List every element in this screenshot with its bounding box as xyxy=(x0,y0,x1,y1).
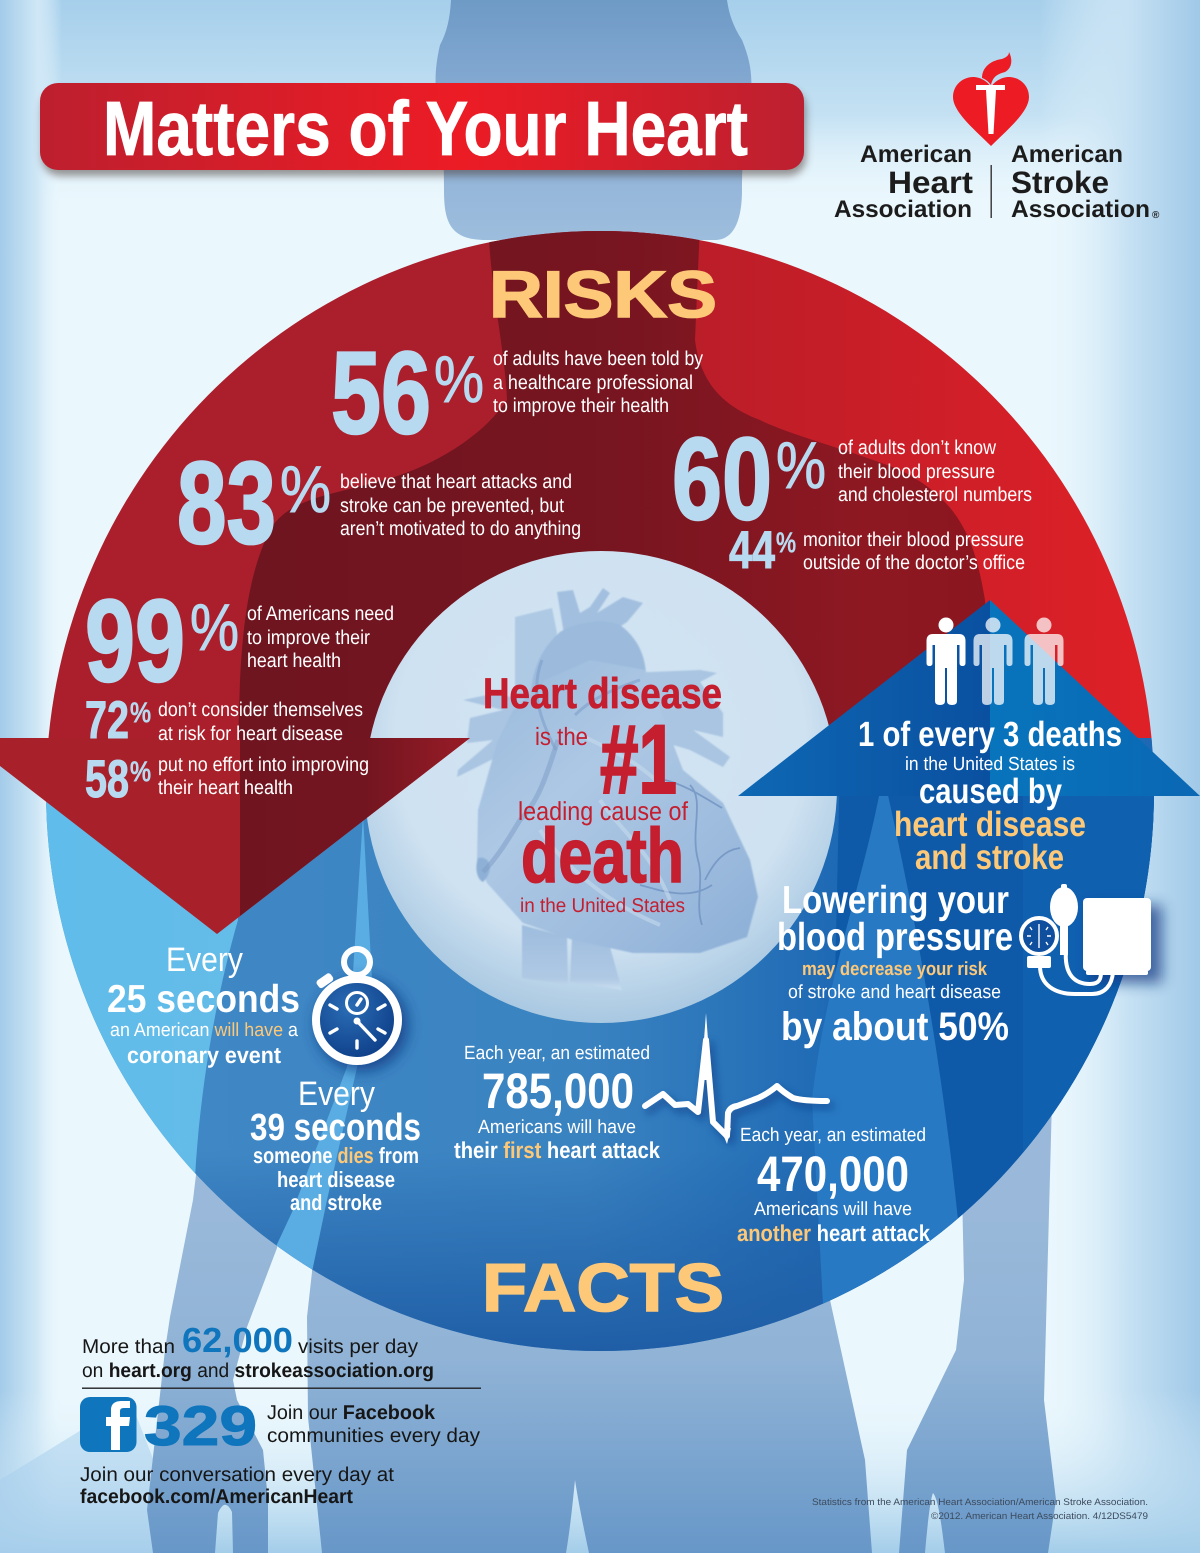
fact: 785,000 first heart attacks: their first heart attack xyxy=(454,1137,660,1163)
fact: every 39 seconds xyxy=(250,1075,421,1215)
stat: 56% xyxy=(331,327,703,458)
stat: 72%: 72 xyxy=(85,691,129,750)
logo: American Heart Association / American Stroke Association: American xyxy=(1011,141,1123,168)
web visits: visits per day xyxy=(298,1336,418,1358)
icon: ekg line xyxy=(645,1013,831,1144)
stat: 83%: % xyxy=(280,452,331,526)
web visits: More than xyxy=(82,1336,175,1358)
stat: 60%: % xyxy=(776,428,826,502)
heart illustration xyxy=(457,588,758,990)
fact: 1 of every 3 deaths xyxy=(858,715,1122,877)
fact: 1 of every 3 deaths: heart disease xyxy=(894,805,1086,844)
icon: blood pressure cuff xyxy=(1021,884,1162,994)
fact: every 39 seconds: someone dies from xyxy=(253,1143,419,1168)
stat: 99%: to improve their xyxy=(247,627,370,649)
fact: lowering your blood pressure: by about 50% xyxy=(781,1005,1009,1049)
stat: 58%: put no effort into improving xyxy=(158,754,369,776)
facebook communities: communities every day xyxy=(267,1425,480,1447)
center message: heart disease is the #1: death xyxy=(521,813,684,899)
icon: facebook xyxy=(80,1397,136,1452)
stat: 99%: % xyxy=(190,590,239,664)
stat: 58%: 58 xyxy=(85,750,129,809)
fact: every 25 seconds: coronary event xyxy=(127,1042,281,1068)
center message: heart disease is the #1: leading cause of xyxy=(518,796,689,826)
fact: lowering your blood pressure: blood pressure xyxy=(777,916,1013,959)
fact: lowering your blood pressure xyxy=(777,879,1013,1049)
stat: 58%: % xyxy=(130,756,151,787)
facebook conversation xyxy=(80,1464,394,1508)
fact: 1 of every 3 deaths: in the United States is xyxy=(905,754,1075,775)
fact: every 25 seconds: an American will have a xyxy=(110,1020,298,1041)
stat: 56%: to improve their health xyxy=(493,395,669,417)
logo: American Heart Association / American Stroke Association: Association xyxy=(834,196,972,223)
facebook conversation: Join our conversation every day at xyxy=(80,1464,394,1486)
stat: 83%: stroke can be prevented, but xyxy=(340,495,564,517)
stat: 60%: 60 xyxy=(672,413,772,544)
stat: 72%: % xyxy=(130,697,151,728)
panel: risks ring xyxy=(40,225,1160,745)
facebook communities xyxy=(144,1394,480,1457)
stat: 44%: outside of the doctor’s office xyxy=(803,552,1025,574)
fact: every 25 seconds: 25 seconds xyxy=(107,978,300,1021)
body silhouette: legs and arms xyxy=(147,1100,1056,1553)
stat: 83%: 83 xyxy=(177,437,276,568)
logo: American Heart Association / American Stroke Association: American xyxy=(860,141,972,168)
stat: 56%: 56 xyxy=(331,327,431,458)
panel: facts ring xyxy=(40,738,1160,1400)
fact: 470,000 another heart attack: Americans will have xyxy=(754,1199,912,1220)
fact: every 39 seconds: and stroke xyxy=(290,1190,382,1215)
logo: American Heart Association / American Stroke Association xyxy=(834,52,1160,223)
fact: 1 of every 3 deaths: 1 of every 3 deaths xyxy=(858,715,1122,754)
fact: every 25 seconds xyxy=(107,941,300,1068)
stat: 99%: of Americans need xyxy=(247,603,394,625)
stat: 44% xyxy=(729,521,1025,580)
stat: 58% xyxy=(85,750,369,809)
fact: every 39 seconds: heart disease xyxy=(277,1167,395,1192)
fact: 470,000 another heart attack xyxy=(737,1125,930,1246)
center message: heart disease is the #1: is the xyxy=(535,723,588,751)
logo: American Heart Association / American Stroke Association: Heart xyxy=(888,165,973,200)
stat: 60%: and cholesterol numbers xyxy=(838,484,1032,506)
stat: 56%: a healthcare professional xyxy=(493,372,693,394)
fact: 1 of every 3 deaths: and stroke xyxy=(915,838,1064,877)
stat: 83% xyxy=(177,437,581,568)
fact: lowering your blood pressure: may decrease your risk xyxy=(802,959,987,980)
icon: stopwatch xyxy=(315,949,408,1071)
stat: 60% xyxy=(672,413,1032,544)
source note xyxy=(812,1497,1148,1522)
stat: 72%: at risk for heart disease xyxy=(158,723,343,745)
stat: 60%: their blood pressure xyxy=(838,461,995,483)
center message: heart disease is the #1 xyxy=(483,670,722,917)
heading: risks: RISKS xyxy=(489,257,717,331)
facebook conversation: facebook.com/AmericanHeart xyxy=(80,1486,353,1508)
stat: 99% xyxy=(85,575,394,706)
logo: American Heart Association / American Stroke Association: Stroke xyxy=(1011,165,1109,200)
icon: three people xyxy=(926,618,1064,705)
fact: 470,000 another heart attack: 470,000 xyxy=(757,1146,909,1202)
fact: 785,000 first heart attacks: Each year, an estimated xyxy=(464,1043,650,1064)
center message: heart disease is the #1: Heart disease xyxy=(483,670,722,718)
stat: 56%: of adults have been told by xyxy=(493,348,703,370)
stat: 99%: heart health xyxy=(247,650,341,672)
source note: Statistics from the American Heart Association/American Stroke Association. xyxy=(812,1497,1148,1508)
fact: every 39 seconds: Every xyxy=(298,1075,375,1113)
body silhouette: torso xyxy=(436,0,751,240)
title banner: Matters of Your Heart xyxy=(103,86,748,172)
stat: 72%: don’t consider themselves xyxy=(158,699,363,721)
fact: every 39 seconds: 39 seconds xyxy=(250,1107,421,1149)
logo: American Heart Association / American Stroke Association: ® xyxy=(1152,210,1160,221)
fact: 785,000 first heart attacks: Americans will have xyxy=(478,1117,636,1138)
stat: 44%: monitor their blood pressure xyxy=(803,529,1024,551)
heading: facts: FACTS xyxy=(482,1250,724,1326)
web visits: on heart.org and strokeassociation.org xyxy=(82,1360,434,1382)
stat: 44%: % xyxy=(776,527,796,558)
web visits: 62,000 xyxy=(182,1321,293,1360)
stat: 56%: % xyxy=(434,342,484,416)
fact: every 25 seconds: Every xyxy=(166,941,243,979)
facebook communities: Join our Facebook xyxy=(267,1402,436,1424)
logo: American Heart Association / American Stroke Association: Association xyxy=(1011,196,1150,223)
center message: heart disease is the #1: in the United States xyxy=(520,895,685,917)
arrow: facts pointing up xyxy=(738,600,1200,796)
fact: 785,000 first heart attacks: 785,000 xyxy=(482,1063,634,1119)
fact: lowering your blood pressure: Lowering your xyxy=(782,879,1009,922)
fact: lowering your blood pressure: of stroke and heart disease xyxy=(788,982,1001,1003)
fact: 470,000 another heart attack: Each year, an estimated xyxy=(740,1125,926,1146)
stat: 44%: 44 xyxy=(729,521,775,580)
stat: 83%: believe that heart attacks and xyxy=(340,471,572,493)
stat: 58%: their heart health xyxy=(158,777,293,799)
fact: 785,000 first heart attacks xyxy=(454,1043,660,1163)
facebook communities: 329 xyxy=(144,1394,257,1457)
fact: 470,000 another heart attack: another heart attack xyxy=(737,1220,930,1246)
inner circle xyxy=(365,551,837,1023)
center message: heart disease is the #1: #1 xyxy=(600,704,677,814)
web visits xyxy=(82,1321,481,1389)
stat: 60%: of adults don’t know xyxy=(838,437,996,459)
stat: 99%: 99 xyxy=(85,575,185,706)
stat: 83%: aren’t motivated to do anything xyxy=(340,518,581,540)
arrow: risks pointing down xyxy=(0,738,470,934)
source note: ©2012. American Heart Association. 4/12DS5479 xyxy=(931,1511,1148,1522)
fact: 1 of every 3 deaths: caused by xyxy=(919,772,1062,811)
stat: 72% xyxy=(85,691,363,750)
